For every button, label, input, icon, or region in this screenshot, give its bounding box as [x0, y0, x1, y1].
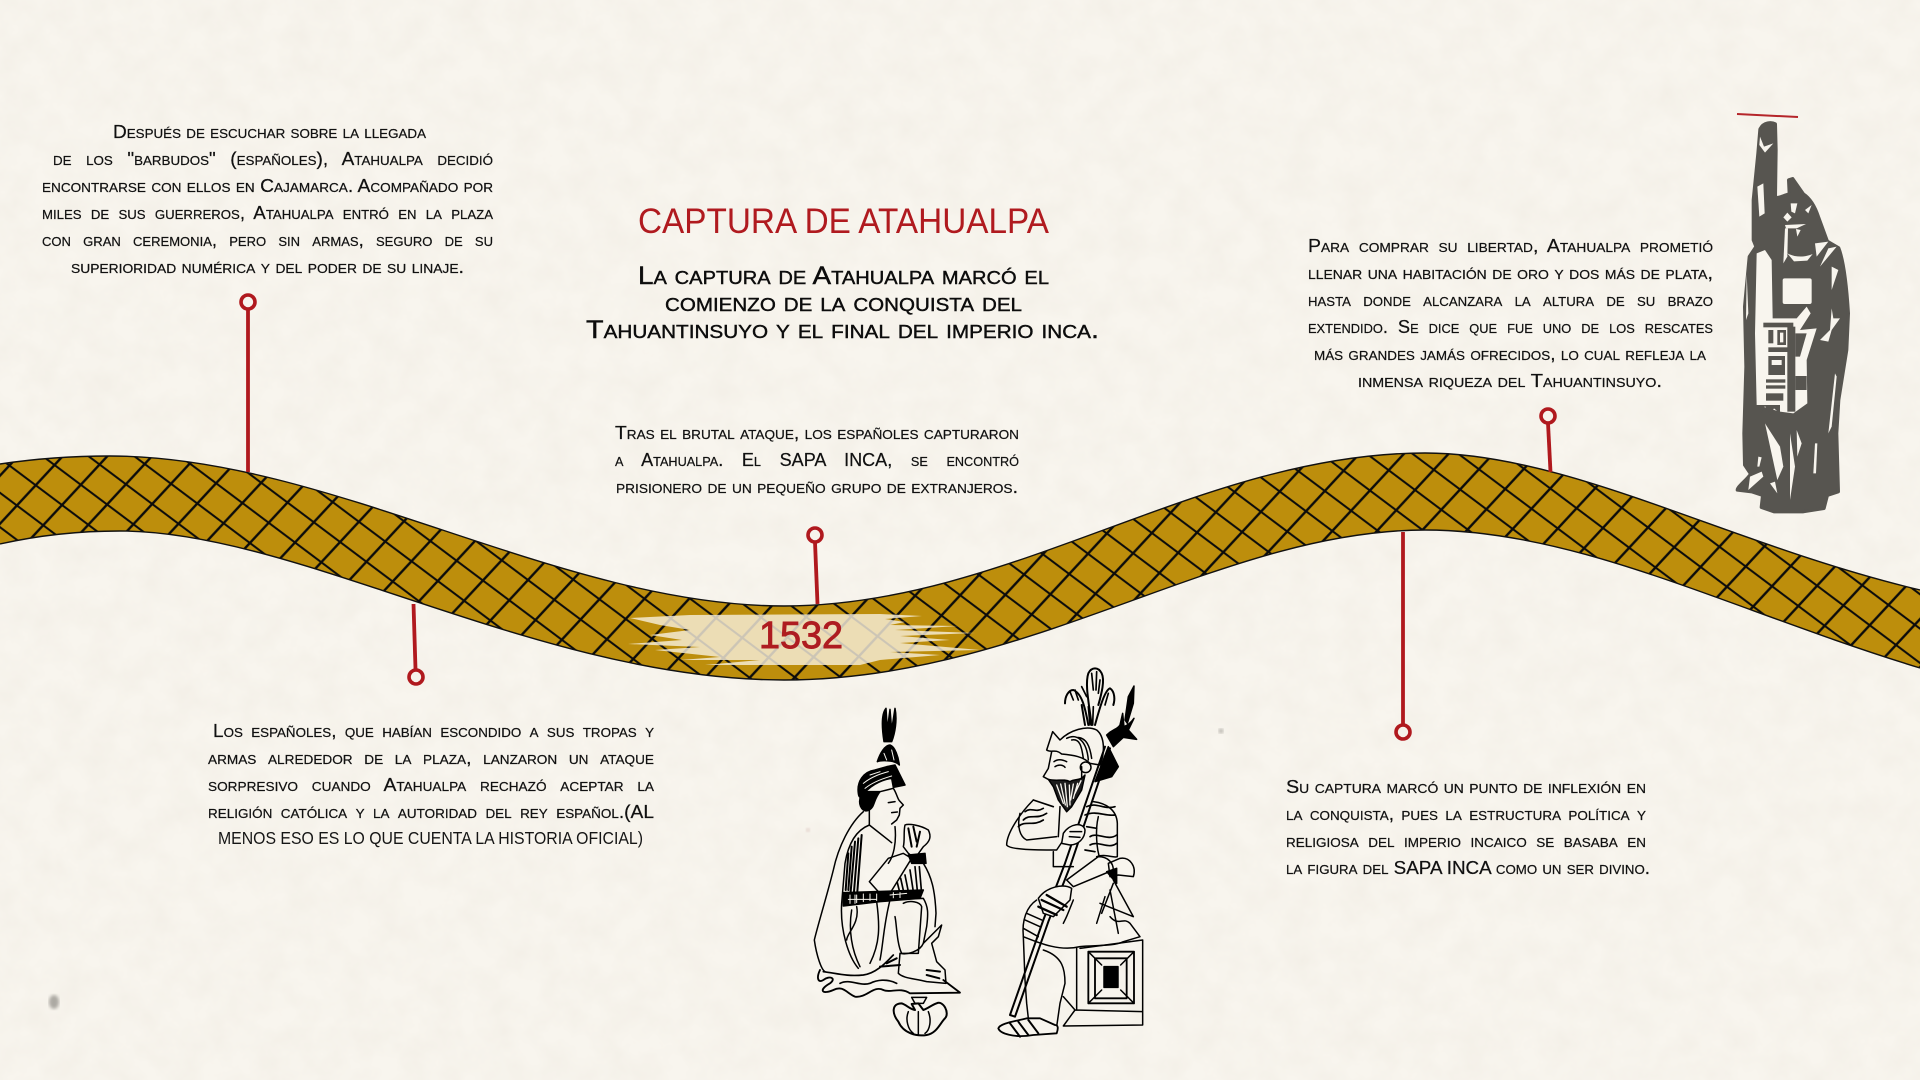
text block: capture after the attack: prisionero de un pequeño grupo de extranjeros. [616, 476, 1018, 497]
text block: Atahualpa meets the Spaniards: de los "barbudos" (españoles), Atahualpa decidió [53, 148, 493, 169]
pin: surprise attack [409, 604, 423, 684]
pin: Atahualpa arrives [241, 295, 255, 472]
text block: capture after the attack: a Atahualpa. El SAPA INCA, se encontró [615, 449, 1019, 470]
year brush patch [628, 614, 980, 665]
text block: Atahualpa meets the Spaniards [42, 121, 493, 277]
text block: capture after the attack: Tras el brutal ataque, los españoles capturaron [615, 422, 1019, 443]
text block: ransom: más grandes jamás ofrecidos, lo cual refleja la [1314, 343, 1706, 364]
icon: statue of Atahualpa with raised arm [1737, 123, 1848, 512]
text block: ransom: llenar una habitación de oro y dos más de plata, [1308, 262, 1713, 283]
text block: surprise attack: Los españoles, que habían escondido a sus tropas y [213, 720, 654, 741]
text block: surprise attack: religión católica y la autoridad del rey español.(AL [208, 801, 654, 822]
illustration: Atahualpa kneeling [814, 708, 960, 1035]
illustration: Spanish soldier seated [998, 668, 1143, 1037]
text block: ransom [1308, 235, 1713, 391]
text block: surprise attack [208, 720, 654, 848]
text block: surprise attack: MENOS ESO ES LO QUE CUENTA LA HISTORIA OFICIAL) [218, 828, 643, 848]
text block: Atahualpa meets the Spaniards: miles de sus guerreros, Atahualpa entró en la plaza [42, 202, 493, 223]
text block: turning point [1286, 776, 1650, 878]
subtitle: Tahuantinsuyo y el final del imperio inca. [586, 316, 1099, 344]
subtitle [586, 262, 1099, 344]
subtitle: comienzo de la conquista del [665, 289, 1022, 317]
pin: ransom [1541, 409, 1555, 472]
text block: Atahualpa meets the Spaniards: superioridad numérica y del poder de su linaje. [71, 256, 464, 277]
text block: Atahualpa meets the Spaniards: Después de escuchar sobre la llegada [113, 121, 426, 142]
timeline band: woven golden net [0, 452, 1920, 681]
text block: ransom: hasta donde alcanzara la altura de su brazo [1308, 289, 1713, 310]
title: CAPTURA DE ATAHUALPA [638, 202, 1050, 241]
text block: ransom: Para comprar su libertad, Atahualpa prometió [1308, 235, 1713, 256]
text block: surprise attack: armas alrededor de la plaza, lanzaron un ataque [208, 747, 654, 768]
red height mark above statue [1737, 114, 1798, 117]
year label: 1532: 1532 [759, 615, 843, 657]
text block: surprise attack: sorpresivo cuando Atahualpa rechazó aceptar la [208, 774, 654, 795]
text block: turning point: la conquista, pues la estructura política y [1286, 803, 1646, 824]
text block: Atahualpa meets the Spaniards: encontrarse con ellos en Cajamarca. Acompañado por [42, 175, 493, 196]
subtitle: La captura de Atahualpa marcó el [638, 262, 1049, 290]
text block: turning point: la figura del SAPA INCA como un ser divino. [1286, 857, 1650, 878]
text block: turning point: Su captura marcó un punto de inflexión en [1286, 776, 1646, 797]
text block: capture after the attack [615, 422, 1019, 497]
pin: capture [808, 528, 822, 604]
text block: turning point: religiosa del imperio incaico se basaba en [1286, 830, 1646, 851]
pin: turning point [1396, 532, 1410, 739]
text block: ransom: inmensa riqueza del Tahuantinsuyo. [1358, 370, 1662, 391]
text block: Atahualpa meets the Spaniards: con gran ceremonia, pero sin armas, seguro de su [42, 229, 493, 250]
text block: ransom: extendido. Se dice que fue uno de los rescates [1308, 316, 1713, 337]
